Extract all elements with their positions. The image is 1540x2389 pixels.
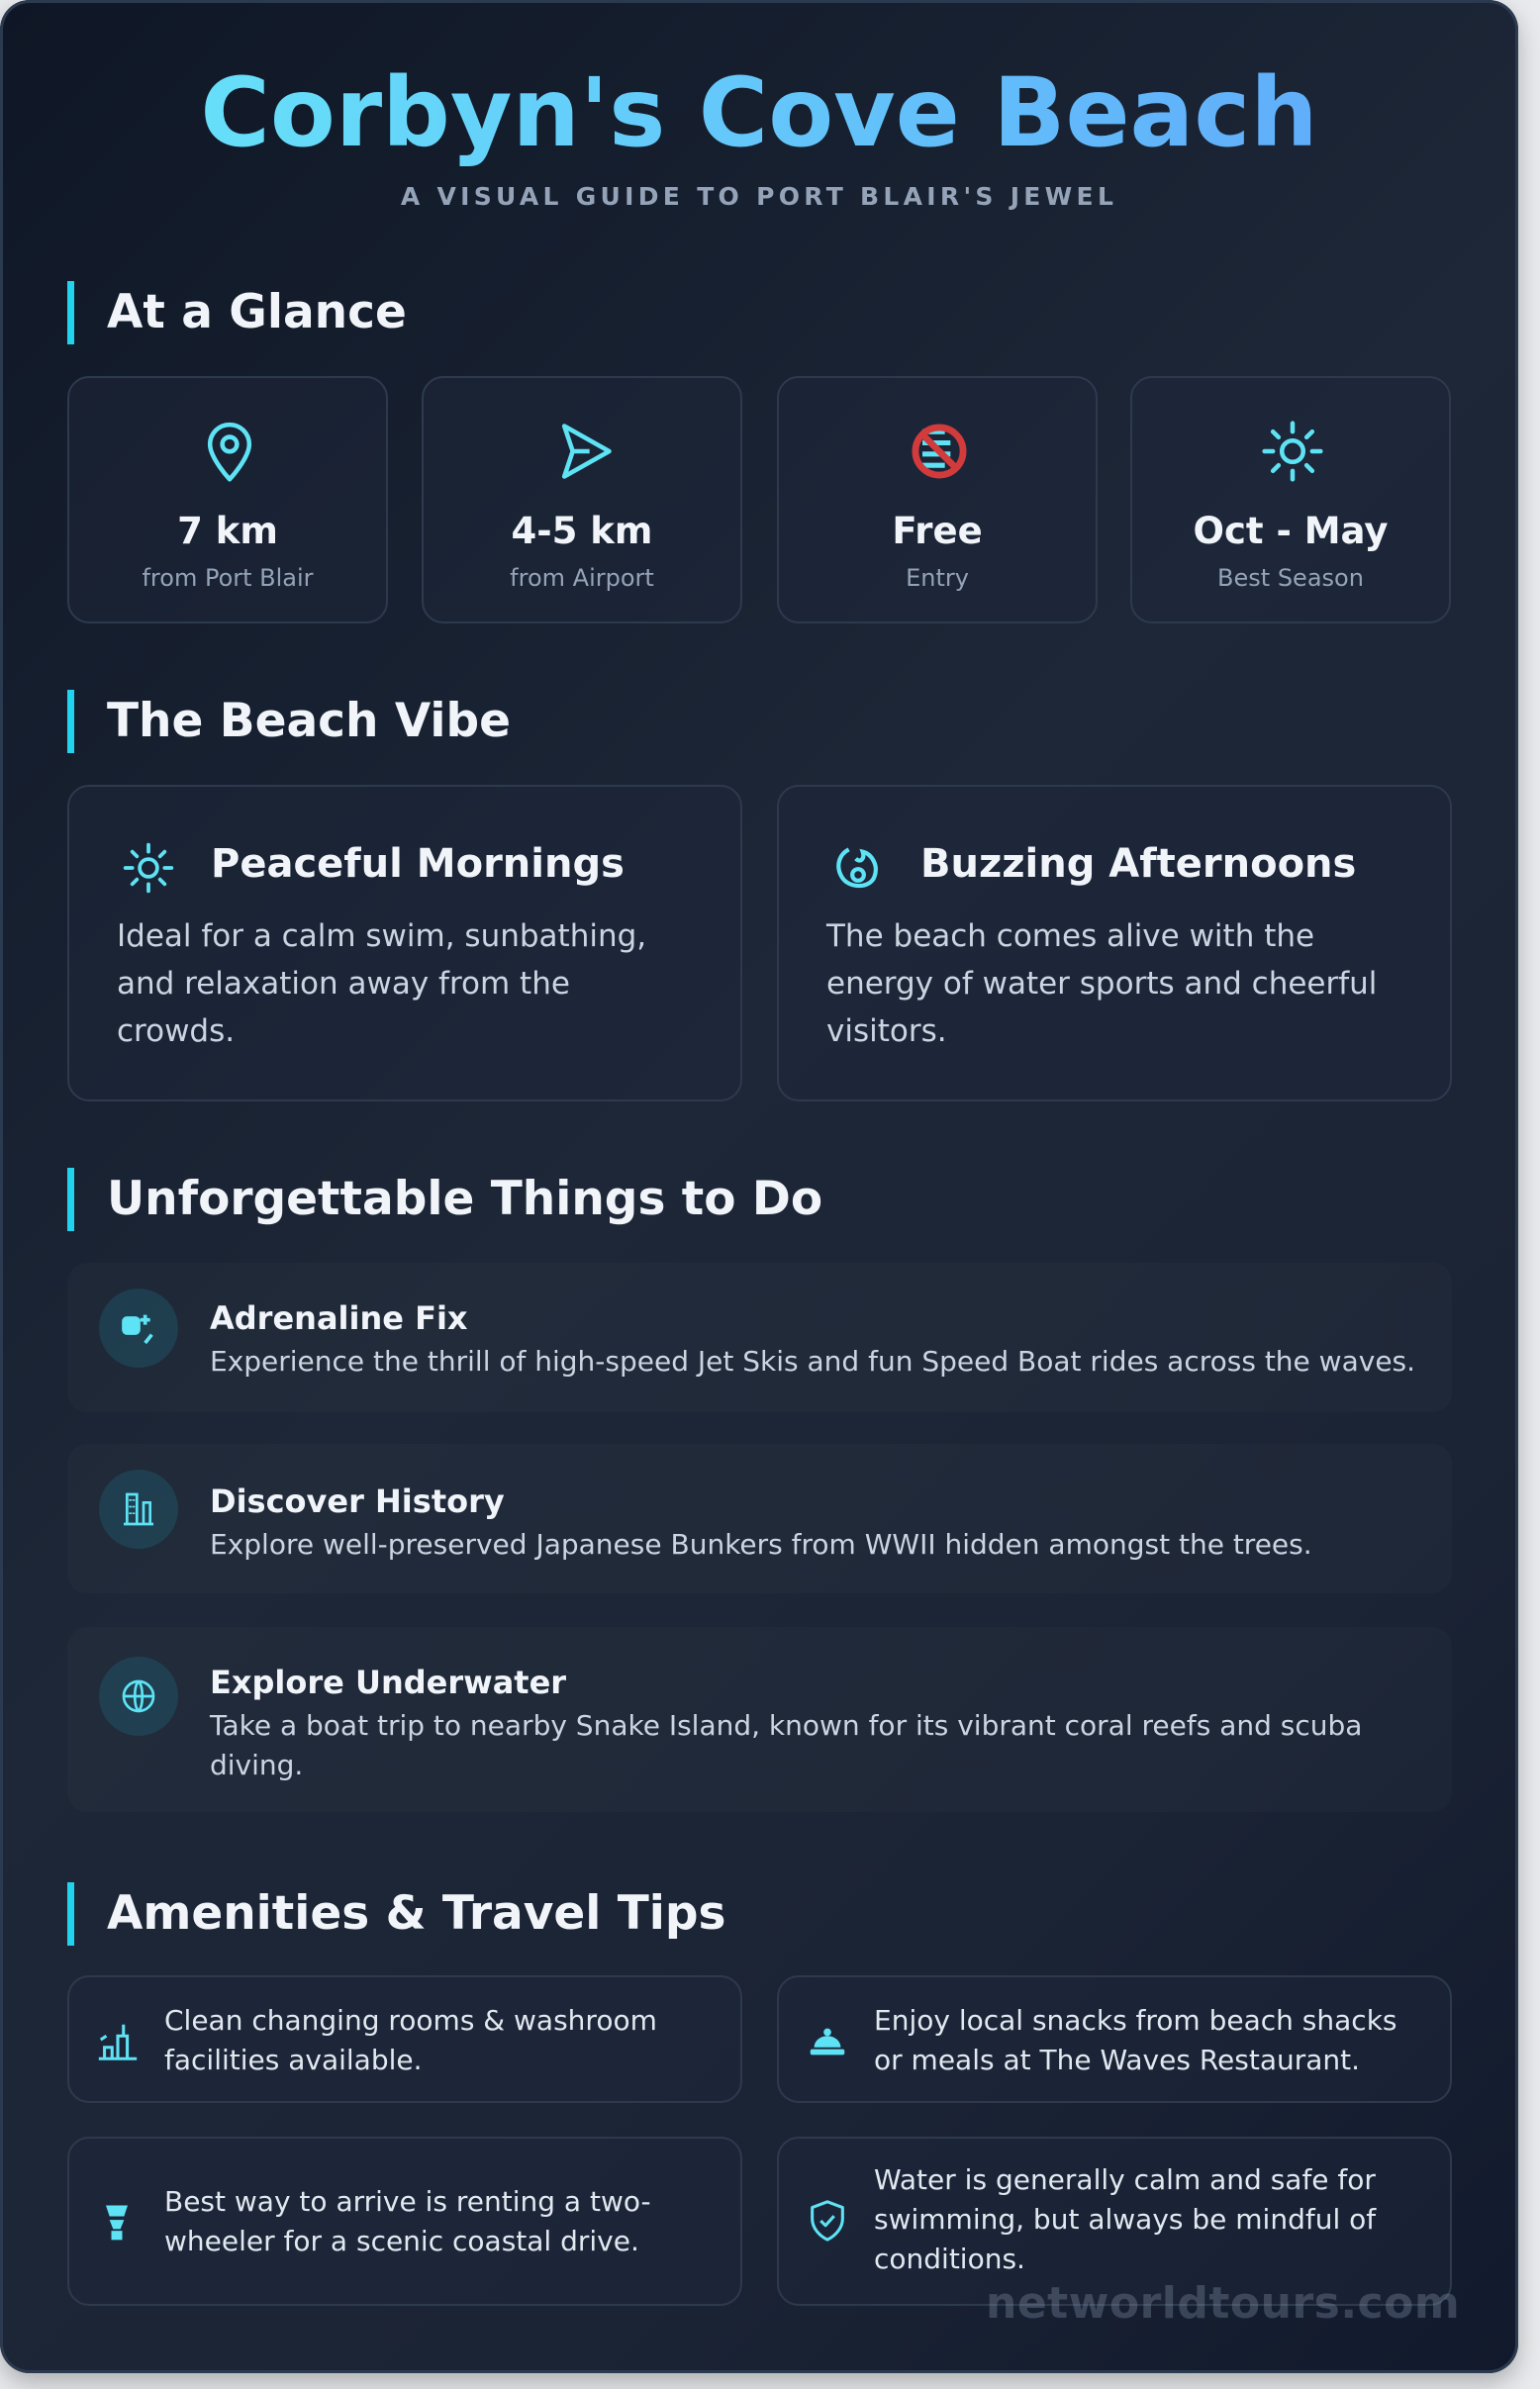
vibe card: peaceful mornings (67, 785, 742, 1101)
vibe card: peaceful mornings: Peaceful Mornings (211, 841, 625, 887)
heading: At a Glance: At a Glance (107, 285, 407, 339)
icon: sun (1262, 421, 1323, 482)
tip: two-wheeler (67, 2137, 742, 2306)
icon: shield check (811, 2200, 844, 2242)
icon: splash (836, 847, 878, 889)
title: Corbyn's Cove Beach (200, 57, 1318, 168)
heading: Amenities & Travel Tips: Amenities & Travel Tips (107, 1886, 726, 1941)
icon: sun (123, 843, 174, 893)
icon: building (99, 1470, 178, 1549)
item: Explore Underwater (67, 1627, 1452, 1812)
vibe card: buzzing afternoons (777, 785, 1452, 1101)
item: Explore Underwater: Take a boat trip to nearby Snake Island, known for its vibrant coral reefs and scuba diving. (210, 1709, 1362, 1781)
icon: send arrow (562, 424, 612, 479)
tip: changing rooms (67, 1975, 742, 2103)
glance card: distance from Port Blair: 7 km (177, 510, 278, 552)
item: Explore Underwater: Explore Underwater (210, 1664, 566, 1701)
glance card: distance from Port Blair: from Port Blair (142, 564, 314, 592)
icon: scooter (106, 2205, 128, 2241)
item: Adrenaline Fix: Experience the thrill of high-speed Jet Skis and fun Speed Boat rides across the waves. (210, 1345, 1415, 1378)
glance card: free entry (777, 376, 1098, 623)
heading: The Beach Vibe: The Beach Vibe (107, 694, 511, 748)
glance card: from airport: 4-5 km (512, 510, 652, 552)
tip: snacks (777, 1975, 1452, 2103)
icon: globe (99, 1657, 178, 1736)
item: Discover History: Discover History (210, 1482, 505, 1520)
tip: two-wheeler: Best way to arrive is renting a two-wheeler for a scenic coastal drive. (164, 2185, 651, 2257)
glance card: distance from Port Blair (67, 376, 388, 623)
heading: Unforgettable Things to Do: Unforgettable Things to Do (107, 1172, 822, 1226)
item: Adrenaline Fix (67, 1263, 1452, 1412)
glance card: from airport (422, 376, 742, 623)
title (0, 53, 1518, 172)
vibe card: buzzing afternoons: Buzzing Afternoons (920, 841, 1356, 887)
vibe card: buzzing afternoons: The beach comes alive with the energy of water sports and cheerful visitors. (826, 918, 1377, 1049)
subtitle: A VISUAL GUIDE TO PORT BLAIR'S JEWEL (401, 182, 1117, 211)
item: Discover History (67, 1444, 1452, 1593)
glance card: best season: Best Season (1217, 564, 1364, 592)
tip: snacks: Enjoy local snacks from beach shacks or meals at The Waves Restaurant. (874, 2004, 1397, 2076)
tip: changing rooms: Clean changing rooms & washroom facilities available. (164, 2004, 657, 2076)
icon: jet ski (99, 1289, 178, 1368)
icon: no ticket (913, 424, 966, 479)
glance card: from airport: from Airport (510, 564, 654, 592)
glance card: best season: Oct - May (1194, 510, 1388, 552)
item: Adrenaline Fix: Adrenaline Fix (210, 1299, 468, 1337)
icon: facilities (99, 2025, 137, 2060)
vibe card: peaceful mornings: Ideal for a calm swim, sunbathing, and relaxation away from the crowds. (117, 918, 646, 1049)
item: Discover History: Explore well-preserved Japanese Bunkers from WWII hidden amongst the trees. (210, 1528, 1312, 1561)
icon: food cloche (810, 2029, 845, 2055)
tip: safety (777, 2137, 1452, 2306)
glance card: free entry: Entry (906, 564, 969, 592)
watermark: networldtours.com (986, 2278, 1460, 2329)
tip: safety: Water is generally calm and safe for swimming, but always be mindful of conditions. (874, 2163, 1376, 2275)
glance card: best season (1130, 376, 1451, 623)
glance card: free entry: Free (892, 510, 983, 552)
icon: map pin (208, 422, 251, 482)
